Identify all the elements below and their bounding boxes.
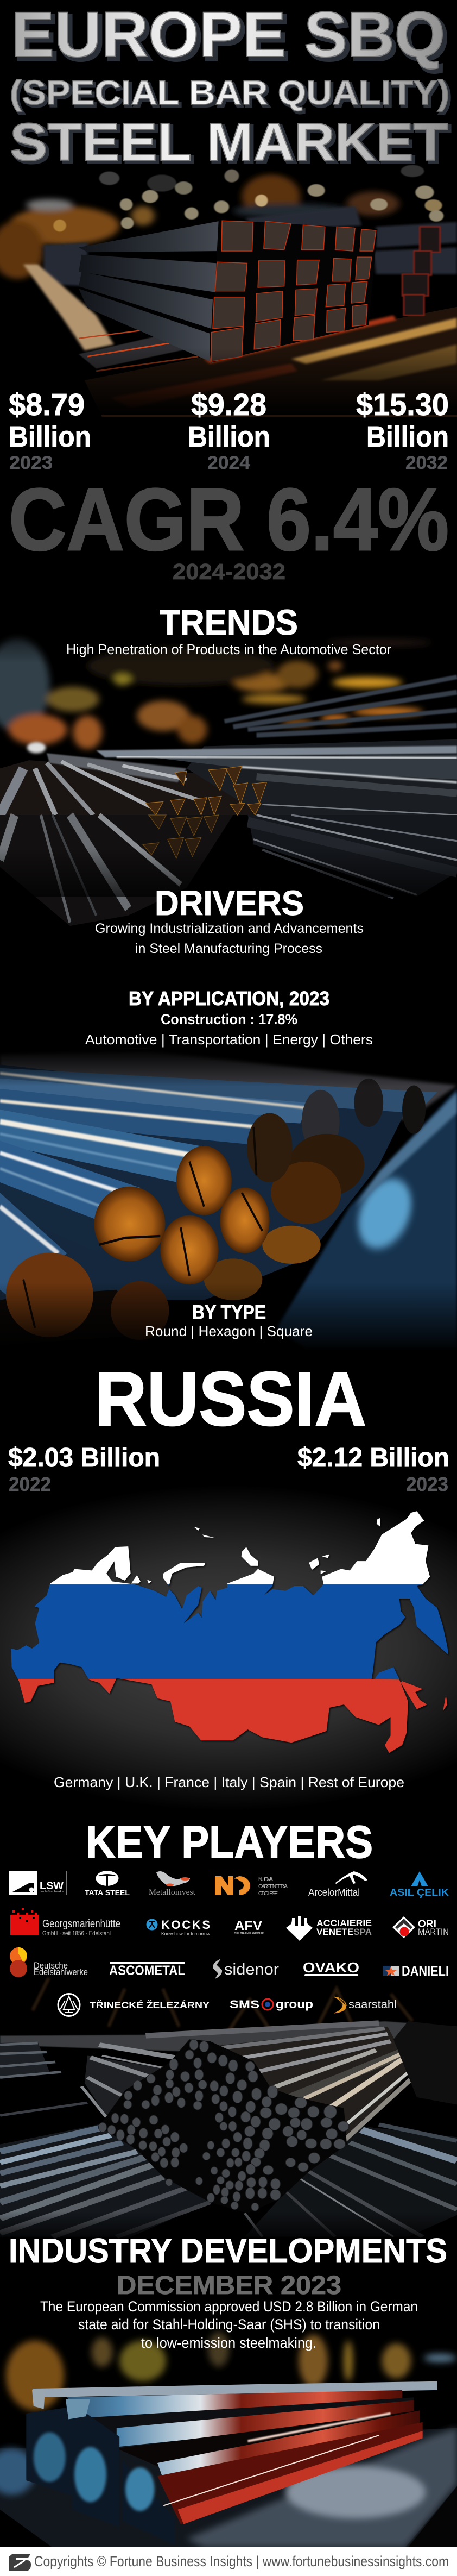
footer (0, 2547, 457, 2576)
logo: Georgsmarienhutte: Georgsmarienhütte (42, 1918, 120, 1930)
region heading: RUSSIA (95, 1356, 366, 1441)
logo: Deutsche Edelstahlwerke (10, 1947, 88, 1977)
rails lower left (0, 815, 181, 923)
trends headlights (27, 742, 46, 753)
stat 2023: $2.12 Billion (297, 1443, 449, 1472)
pipes back haze (0, 1051, 457, 1120)
stat 2022: $2.03 Billion (8, 1443, 160, 1472)
country list: Germany | U.K. | France | Italy | Spain | Rest of Europe (54, 1774, 404, 1790)
developments blurred background lights (6, 2332, 456, 2410)
trends rails fanning to the lower left (0, 762, 204, 815)
logo: Ori Martin: ORI (418, 1919, 436, 1930)
trends heading: TRENDS (160, 602, 298, 642)
logo: Tata Steel (85, 1871, 130, 1897)
rods dark pile behind the ends (99, 2039, 347, 2213)
hero floor and light strips (23, 265, 457, 417)
by application heading: BY APPLICATION, 2023 (129, 987, 329, 1010)
stat 2032: Billion (366, 421, 449, 453)
logo: AFV Beltrame: AFV (234, 1919, 262, 1933)
logo: Nuova Carpenteria Odolese (215, 1876, 288, 1897)
application list: Automotive | Transportation | Energy | Others (85, 1031, 373, 1048)
rods lower right fan (245, 2124, 457, 2237)
logo: ArcelorMittal: ArcelorMittal (308, 1887, 360, 1898)
logo: Danieli: DANIELI (402, 1964, 449, 1979)
rods left horizontals (0, 2043, 87, 2115)
round steel pipes image (0, 1051, 457, 1349)
pipes dark blue base (0, 1064, 408, 1307)
trends blurred factory lights (0, 638, 431, 749)
CAGR period: 2024-2032 (173, 559, 285, 584)
developments description (40, 2298, 418, 2351)
trends triangular bar ends (145, 766, 266, 815)
title line 2: (SPECIAL BAR QUALITY) (12, 76, 452, 114)
developments description: to low-emission steelmaking. (141, 2335, 316, 2351)
hero far-right end faces (402, 227, 440, 315)
logo: SMS group: SMS (230, 1998, 259, 2011)
by type heading: BY TYPE (192, 1302, 266, 1323)
stat 2023 (9, 387, 91, 473)
trends main steel bars (47, 739, 457, 815)
stat 2032: 2032 (405, 453, 448, 473)
industry developments image: blue and red bars (0, 2332, 457, 2548)
logo: Ovako: OVAKO (303, 1959, 359, 1976)
drivers description (95, 921, 364, 956)
market value stats (9, 387, 449, 473)
trends image: steel rails in a factory (0, 638, 457, 815)
logo: Asil Celik: ASIL ÇELIK (390, 1887, 449, 1898)
rods far right dark bundle (393, 2021, 457, 2104)
map backdrop glow (0, 1485, 457, 1811)
rails upper right (247, 815, 457, 898)
stat 2023: $8.79 (9, 387, 85, 422)
hero bar end faces (211, 221, 376, 361)
drivers description: Growing Industrialization and Advancements (95, 921, 364, 936)
rods upper left group (81, 2045, 175, 2119)
title line 3: STEEL MARKET (12, 114, 450, 174)
logo: Metalloinvest: Metalloinvest (149, 1888, 196, 1897)
developments description: state aid for Stahl-Holding-Saar (SHS) to transition (78, 2316, 380, 2333)
logo: Saarstahl: saarstahl (348, 1998, 397, 2011)
logo: Danieli (383, 1964, 449, 1979)
map: Russia filled with the flag colours (0, 1508, 457, 1760)
stat 2024 (188, 387, 270, 473)
trends rear dark bars (224, 677, 457, 735)
stat 2023 (297, 1443, 449, 1495)
rods image: faint rafters (33, 1978, 412, 2032)
developments long bars (32, 2381, 437, 2524)
rods upper right group (145, 2023, 411, 2141)
logo: Georgsmarienhutte: GmbH · seit 1856 · Edelstahl (42, 1929, 111, 1937)
logo: Georgsmarienhutte (10, 1908, 120, 1937)
logo: Acciaierie Venete: ACCIAIERIE (316, 1918, 372, 1928)
logo: LSW: Lech-Stahlwerke (40, 1890, 64, 1894)
stat 2024: $9.28 (191, 387, 266, 422)
triangular bar ends, lower (143, 815, 219, 858)
hero black gaps between bars (211, 220, 377, 362)
construction share: Construction : 17.8% (161, 1011, 297, 1027)
logo: LSW (9, 1871, 66, 1895)
title (10, 0, 452, 174)
hero image: stacked square steel bars (0, 165, 457, 417)
by type section (145, 1302, 313, 1339)
by application section (85, 987, 373, 1048)
hero bokeh background (0, 165, 443, 279)
stat 2024: 2024 (207, 453, 250, 473)
stat 2022: 2022 (9, 1473, 51, 1495)
hero bar sides (79, 221, 221, 361)
stat 2023: 2023 (406, 1473, 448, 1495)
footer logo (9, 2554, 31, 2571)
logo: Nuova Carpenteria Odolese: CARPENTERIA (258, 1884, 288, 1890)
logo: SMS group: group (276, 1997, 313, 2011)
steel pipes bodies (0, 1068, 437, 1345)
developments description: The European Commission approved USD 2.8 Billion in German (40, 2298, 418, 2315)
logo: Trinecke Zelezarny: TŘINECKÉ ŽELEZÁRNY (90, 2000, 210, 2010)
logo: Tata Steel: TATA STEEL (85, 1888, 130, 1897)
hero rear bars (44, 206, 457, 286)
orange pipe end faces (6, 1079, 426, 1340)
logo: Deutsche Edelstahlwerke: Edelstahlwerke (34, 1967, 88, 1977)
logo: Trinecke Zelezarny (58, 1994, 210, 2016)
trends continuation: rails below the fold (0, 815, 457, 926)
trends description: High Penetration of Products in the Automotive Sector (66, 641, 391, 657)
key players logo grid (9, 1871, 449, 2016)
rods image: bundle of round steel bars (0, 2021, 457, 2237)
key players heading: KEY PLAYERS (86, 1816, 373, 1867)
logo: Sidenor: sidenor (224, 1961, 279, 1978)
big foreground pipe (277, 1089, 457, 1349)
developments front end blocks (26, 2389, 175, 2544)
logo: ArcelorMittal (308, 1871, 367, 1898)
title line 1: EUROPE SBQ (11, 0, 445, 71)
logo: Kocks (147, 1918, 210, 1936)
logo: Sidenor (213, 1959, 279, 1979)
stat 2024: Billion (188, 421, 270, 453)
logo: Metalloinvest (149, 1871, 196, 1897)
logo: Ascometal: ASCOMETAL (109, 1963, 185, 1978)
rods back bands (0, 2021, 457, 2237)
logo: Nuova Carpenteria Odolese: NUOVA (258, 1877, 273, 1883)
logo: Kocks: KOCKS (161, 1918, 210, 1932)
logo: Ori Martin: MARTIN (418, 1927, 449, 1937)
logo: SMS group (230, 1997, 313, 2011)
industry developments text (9, 2232, 447, 2351)
logo: AFV Beltrame: BELTRAME GROUP (234, 1932, 264, 1935)
stat 2023: Billion (9, 421, 91, 453)
logo: Acciaierie Venete: VENETESPA (316, 1927, 372, 1937)
rods cut ends (99, 2039, 349, 2211)
stat 2032 (356, 387, 449, 473)
stat 2023: 2023 (9, 453, 53, 473)
logo: LSW: LSW (40, 1881, 64, 1892)
logo: Nuova Carpenteria Odolese: ODOLESE (258, 1891, 278, 1897)
title line 2: (SPECIAL BAR QUALITY) (10, 74, 449, 112)
logo: Deutsche Edelstahlwerke: Deutsche (34, 1960, 68, 1971)
drivers heading: DRIVERS (155, 883, 304, 923)
drivers section (95, 883, 364, 956)
title line 1: EUROPE SBQ (14, 2, 448, 74)
type list: Round | Hexagon | Square (145, 1323, 313, 1339)
rails dark bases (0, 815, 457, 926)
stat 2032: $15.30 (356, 387, 449, 422)
developments date: DECEMBER 2023 (117, 2271, 341, 2300)
developments floor (0, 2428, 457, 2548)
drivers description: in Steel Manufacturing Process (135, 941, 322, 956)
rods lower left fan (0, 2126, 210, 2237)
logo: Kocks: Know-how for tomorrow (161, 1931, 210, 1936)
logo: Acciaierie Venete (286, 1916, 372, 1941)
stat 2022 (8, 1443, 160, 1495)
trends dark base under rails (0, 760, 262, 815)
title line 3: STEEL MARKET (10, 112, 448, 172)
logo: Ori Martin (392, 1916, 449, 1938)
logo: Asil Celik (390, 1871, 449, 1898)
region stats (8, 1443, 449, 1495)
logo: Saarstahl (334, 1997, 397, 2013)
